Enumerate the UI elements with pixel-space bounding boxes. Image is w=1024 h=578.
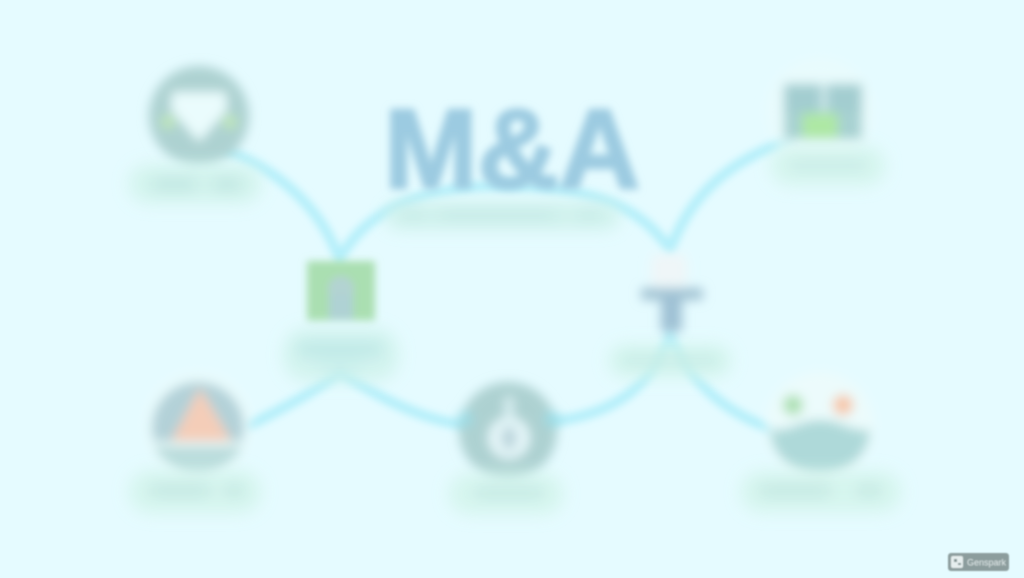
label: top right [770, 146, 886, 186]
label: center left [283, 328, 399, 382]
label: bottom left [128, 470, 262, 514]
label: bottom right [740, 471, 902, 513]
subtitle placeholder [385, 202, 620, 230]
node: bottom left triangle icon [144, 371, 252, 479]
watermark badge: Genspark [967, 558, 1007, 568]
node: top right grid icon [766, 58, 874, 166]
label: top left [128, 164, 262, 204]
title: M&A [384, 86, 640, 212]
node: bottom center coin icon [458, 382, 559, 480]
watermark badge [948, 553, 1009, 571]
node: center right figure icon [641, 254, 703, 332]
node: bottom right balance icon [766, 372, 874, 480]
label: bottom center [448, 473, 564, 515]
label: center right [608, 344, 732, 378]
node: center left green square icon [307, 261, 375, 321]
node: top left shield icon [149, 66, 249, 166]
connector network [225, 140, 790, 430]
